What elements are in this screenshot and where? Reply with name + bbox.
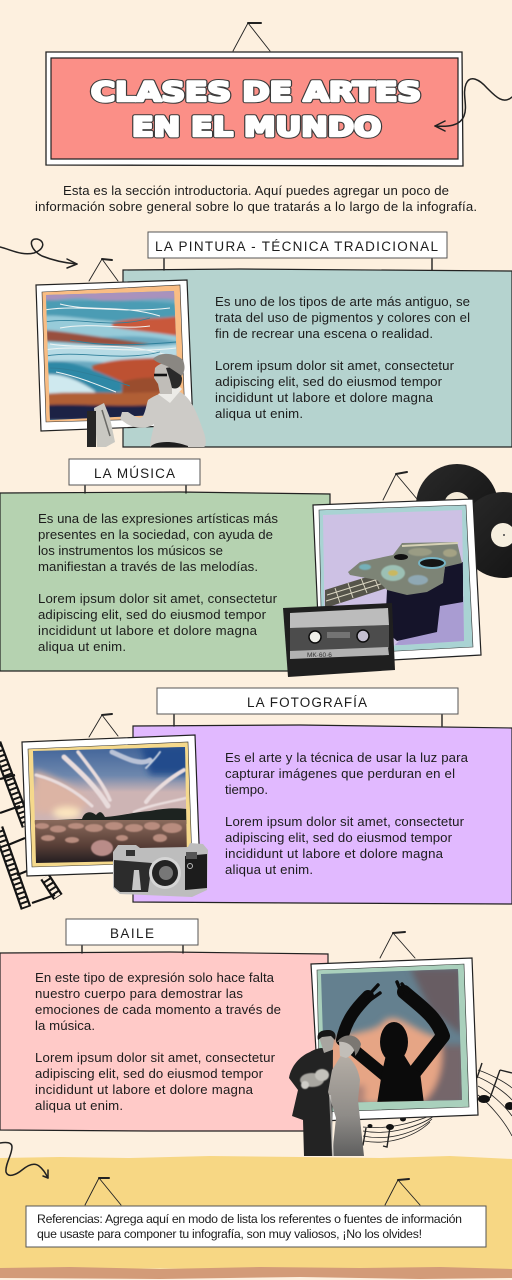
cassette: MK·60·6 <box>307 652 332 659</box>
hanger: title <box>233 23 270 51</box>
body text: music: los instrumentos los músicos se <box>38 543 223 558</box>
records <box>416 464 512 578</box>
body text: painting: Es uno de los tipos de arte más antiguo, se <box>215 294 470 309</box>
photo: ukulele <box>320 510 466 652</box>
body text: dance <box>35 970 281 1113</box>
intro text: información sobre general sobre lo que tratarás a lo largo de la infografía. <box>35 199 477 214</box>
references text <box>37 1212 462 1241</box>
body text: dance: incididunt ut labore et dolore magna <box>35 1082 254 1097</box>
couple <box>289 1030 364 1156</box>
hanger: dance <box>380 932 415 958</box>
intro text <box>35 183 477 214</box>
body text: music: Lorem ipsum dolor sit amet, consectetur <box>38 591 278 606</box>
body text: painting: Lorem ipsum dolor sit amet, consectetur <box>215 358 455 373</box>
panel: painting <box>123 269 512 447</box>
framed photo: ukulele <box>313 499 481 664</box>
body text: music: adipiscing elit, sed do eiusmod tempor <box>38 607 267 622</box>
section: music <box>0 459 512 677</box>
photo: dancer silhouette <box>318 965 465 1105</box>
body text: photography: adipiscing elit, sed do eiusmod tempor <box>225 830 453 845</box>
body text: painting <box>215 294 470 421</box>
intro text: Esta es la sección introductoria. Aquí puedes agregar un poco de <box>63 183 449 198</box>
body text: photography: Es el arte y la técnica de usar la luz para <box>225 750 469 765</box>
body text: dance: Lorem ipsum dolor sit amet, consectetur <box>35 1050 276 1065</box>
hanger: painting <box>89 259 118 281</box>
header: painting: LA PINTURA - TÉCNICA TRADICIONAL <box>155 239 438 254</box>
references card <box>26 1206 486 1247</box>
body text: painting: adipiscing elit, sed do eiusmod tempor <box>215 374 443 389</box>
hanger: photography <box>89 714 118 737</box>
footer band <box>0 1156 512 1279</box>
section: dance <box>0 919 512 1156</box>
title text: EN EL MUNDO <box>132 112 381 143</box>
title text: CLASES DE ARTES <box>91 77 421 108</box>
title frame <box>46 52 463 166</box>
header: photography: LA FOTOGRAFÍA <box>247 695 367 710</box>
body text: painting: fin de recrear una escena o realidad. <box>215 326 433 341</box>
header: dance: BAILE <box>110 926 154 941</box>
woman painter <box>120 354 206 447</box>
panel: dance <box>0 952 328 1131</box>
film strip <box>0 743 58 908</box>
body text: dance: la música. <box>35 1018 95 1033</box>
body text: music: aliqua ut enim. <box>38 639 126 654</box>
header: photography <box>157 688 458 726</box>
panel: photography <box>133 725 512 904</box>
music staves <box>360 1063 512 1147</box>
body text: dance: adipiscing elit, sed do eiusmod tempor <box>35 1066 264 1081</box>
body text: music <box>38 511 278 654</box>
body text: photography: Lorem ipsum dolor sit amet, consectetur <box>225 814 465 829</box>
painting: abstract swirl <box>46 291 177 420</box>
cassette <box>283 603 395 677</box>
references box <box>26 1178 486 1247</box>
header: music <box>69 459 200 493</box>
body text: painting: aliqua ut enim. <box>215 406 303 421</box>
framed photo: dancer <box>311 958 478 1121</box>
section: photography <box>0 688 512 908</box>
hanger: references right <box>385 1179 420 1205</box>
body text: photography: capturar imágenes que perduran en el <box>225 766 455 781</box>
body text: painting: trata del uso de pigmentos y colores con el <box>215 310 470 325</box>
panel: music <box>0 492 330 671</box>
references text: Referencias: Agrega aquí en modo de lista los referentes o fuentes de información <box>37 1212 462 1226</box>
hanger: references left <box>85 1178 121 1205</box>
title banner <box>46 23 463 166</box>
header: dance <box>66 919 198 953</box>
camera <box>113 843 208 897</box>
body text: photography <box>225 750 469 877</box>
easel <box>87 403 115 447</box>
body text: dance: nuestro cuerpo para demostrar las <box>35 986 243 1001</box>
body text: music: incididunt ut labore et dolore magna <box>38 623 258 638</box>
header: music: LA MÚSICA <box>94 466 175 481</box>
arrow: painting squiggle <box>0 239 77 268</box>
title text: CLASES DE ARTES <box>91 77 421 108</box>
body text: music: Es una de las expresiones artísticas más <box>38 511 278 526</box>
photo: sky and field <box>30 745 190 865</box>
title text: EN EL MUNDO <box>132 112 381 143</box>
body text: dance: En este tipo de expresión solo hace falta <box>35 970 275 985</box>
body text: music: presentes en la sociedad, con ayuda de <box>38 527 273 542</box>
body text: photography: incididunt ut labore et dolore magna <box>225 846 444 861</box>
body text: dance: emociones de cada momento a través de <box>35 1002 281 1017</box>
references text: que usaste para componer tu infografía, son muy valiosos, ¡No los olvides! <box>37 1227 422 1241</box>
framed photo: sunset field <box>22 735 200 876</box>
header: painting <box>148 232 447 270</box>
hanger: music <box>383 472 417 500</box>
title text <box>91 77 421 143</box>
body text: music: manifiestan a través de las melodías. <box>38 559 258 574</box>
section: painting <box>36 232 512 447</box>
body text: painting: incididunt ut labore et dolore magna <box>215 390 434 405</box>
body text: photography: aliqua ut enim. <box>225 862 313 877</box>
body text: photography: tiempo. <box>225 782 268 797</box>
arrow: title squiggle <box>435 79 512 131</box>
framed painting <box>36 280 193 431</box>
arrow: footer squiggle <box>0 1142 48 1178</box>
body text: dance: aliqua ut enim. <box>35 1098 123 1113</box>
